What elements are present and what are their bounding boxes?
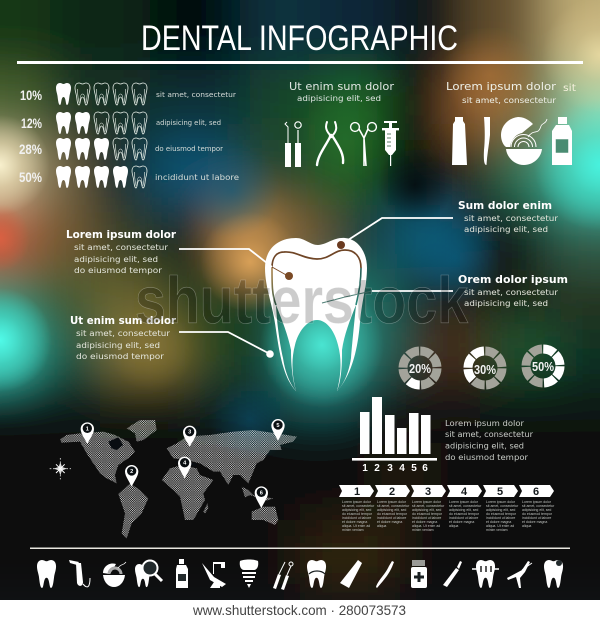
donut: 20%: 20% [409, 361, 431, 376]
icon: toothbrush [484, 117, 490, 165]
icon: crowned tooth [307, 560, 326, 588]
heading: care: sit [563, 83, 576, 94]
world map: 3 [188, 430, 191, 436]
step descriptions: do eiusmod tempor [377, 512, 408, 516]
icon: toothpaste [340, 560, 362, 588]
bar chart: 3 [387, 463, 393, 474]
heading: care: sit amet, consectetur [462, 95, 557, 105]
step descriptions: sit amet, consectetur [377, 504, 410, 508]
process arrows: 3 [425, 486, 431, 498]
step descriptions: Lorem ipsum dolor [449, 500, 479, 504]
process arrows: 4 [461, 486, 468, 498]
step descriptions: do eiusmod tempor [486, 512, 517, 516]
callout: upper left: do eiusmod tempor [74, 265, 163, 275]
step descriptions: minim veniam [342, 528, 364, 532]
step descriptions: do eiusmod tempor [412, 512, 443, 516]
icon: implant [240, 560, 258, 588]
row 28% [19, 138, 224, 160]
world map: 5 [276, 423, 280, 429]
donut: 20% [403, 351, 437, 385]
step descriptions: adipisicing elit, sed [522, 508, 551, 512]
step descriptions: aliqua [522, 524, 531, 528]
row 10% [20, 83, 237, 105]
row 12% [21, 112, 221, 134]
step descriptions: sit amet, consectetur [522, 504, 555, 508]
heading: tools: adipisicing elit, sed [297, 93, 381, 103]
panel: tooth percentage rows [19, 83, 239, 188]
world map [50, 419, 297, 538]
step descriptions: sit amet, consectetur [412, 504, 445, 508]
step descriptions: et dolore magna [522, 520, 547, 524]
icons: oral care [452, 117, 572, 165]
callout: upper right: adipisicing elit, sed [464, 224, 548, 234]
row 10%: 10% [20, 87, 42, 103]
world map: 2 [130, 469, 133, 475]
bar chart caption: adipisicing elit, sed [445, 442, 524, 450]
pins [81, 419, 285, 508]
donut: 30%: 30% [474, 362, 496, 377]
step descriptions: adipisicing elit, sed [377, 508, 406, 512]
tooth diagram [265, 238, 372, 391]
callout: upper left: Lorem ipsum dolor [66, 229, 177, 241]
icon: tooth with decay [544, 560, 563, 588]
callout: upper right: sit amet, consectetur [464, 213, 559, 223]
bar chart: 4 [399, 463, 405, 474]
callout: upper left: sit amet, consectetur [74, 242, 169, 252]
bar chart caption [445, 419, 534, 462]
icon: tooth under magnifier [135, 560, 162, 587]
donut: 30% [461, 344, 509, 392]
icon: electric toothbrush [443, 561, 462, 587]
title: DENTAL INFOGRAPHIC [141, 19, 458, 58]
row 50%: incididunt ut labore [155, 172, 239, 182]
callout: lower right: sit amet, consectetur [464, 287, 559, 297]
callout: lower right: Orem dolor ipsum [458, 274, 568, 286]
callout: lower left: adipisicing elit, sed [76, 340, 160, 350]
icon row [37, 559, 563, 590]
callout: upper right [337, 200, 559, 249]
icon: medicine bottle [411, 560, 427, 588]
icon: toothbrush [376, 561, 394, 588]
row 12%: 12% [21, 115, 42, 131]
step descriptions: minim veniam [486, 528, 508, 532]
icon: mouthwash [552, 117, 572, 165]
step descriptions: et dolore magna [449, 520, 474, 524]
step descriptions: incididunt ut labore [486, 516, 515, 520]
step descriptions: adipisicing elit, sed [412, 508, 441, 512]
callout: lower left: sit amet, consectetur [76, 328, 171, 338]
process arrows [339, 485, 554, 498]
icon: forceps [351, 123, 376, 166]
icon: tooth with braces [472, 560, 499, 588]
heading: care: Lorem ipsum dolor [446, 80, 557, 93]
callout: lower right: adipisicing elit, sed [464, 298, 548, 308]
step descriptions: Lorem ipsum dolor [412, 500, 442, 504]
step descriptions: do eiusmod tempor [522, 512, 553, 516]
step descriptions: adipisicing elit, sed [449, 508, 478, 512]
heading: care [446, 80, 576, 105]
step descriptions: sit amet, consectetur [342, 504, 375, 508]
step descriptions: incididunt ut labore [342, 516, 371, 520]
process arrows: 2 [389, 486, 395, 498]
row 28%: 28% [19, 141, 42, 157]
bar chart: 5 [411, 463, 417, 474]
world map: 4 [183, 461, 187, 467]
map gaps [108, 437, 197, 467]
row 50%: 50% [19, 169, 42, 185]
bar chart [352, 397, 437, 474]
donut: 50%: 50% [532, 359, 554, 374]
callout: upper right: Sum dolor enim [458, 200, 552, 212]
icon: syringe [382, 121, 399, 166]
step descriptions: aliqua. Ut enim ad [342, 524, 370, 528]
footer credit: www.shutterstock.com · 280073573 [192, 602, 406, 618]
icon: floss [103, 562, 126, 587]
icon: pliers [507, 561, 532, 588]
callout: upper left [66, 229, 293, 280]
process arrows: 1 [354, 486, 360, 498]
step descriptions: et dolore magna [486, 520, 511, 524]
process arrows: 6 [533, 486, 539, 498]
bar chart: 2 [374, 463, 380, 474]
watermark: shutterstock [135, 263, 468, 337]
step descriptions: Lorem ipsum dolor [522, 500, 552, 504]
icon: pliers [317, 122, 343, 165]
world map: 1 [86, 426, 89, 432]
step descriptions: incididunt ut labore [377, 516, 406, 520]
step descriptions: incididunt ut labore [522, 516, 551, 520]
step descriptions [342, 500, 555, 532]
world map: 6 [260, 490, 263, 496]
row 10%: sit amet, consectetur [156, 90, 237, 99]
donut: 50% [526, 349, 560, 383]
icon: dental chair [202, 562, 226, 588]
icons: dental tools [285, 121, 399, 167]
step descriptions: et dolore magna [412, 520, 437, 524]
icon: probes [285, 122, 301, 167]
step descriptions: adipisicing elit, sed [342, 508, 371, 512]
icon: probes [273, 562, 293, 590]
step descriptions: aliqua. Ut enim ad [486, 524, 514, 528]
step descriptions: aliqua [377, 524, 386, 528]
bar chart caption: sit amet, consectetur [445, 430, 534, 439]
row 28%: do eiusmod tempor [155, 144, 224, 153]
step descriptions: sit amet, consectetur [486, 504, 519, 508]
step descriptions: Lorem ipsum dolor [377, 500, 407, 504]
callout: upper left: adipisicing elit, sed [74, 254, 158, 264]
step descriptions: do eiusmod tempor [342, 512, 373, 516]
footer credit [0, 600, 600, 620]
bar chart caption: do eiusmod tempor [445, 453, 529, 462]
step descriptions: adipisicing elit, sed [486, 508, 515, 512]
process arrows: 5 [497, 486, 503, 498]
icon: mouthwash [176, 559, 188, 588]
icon: floss [501, 117, 547, 165]
step descriptions: sit amet, consectetur [449, 504, 482, 508]
step descriptions: aliqua [449, 524, 458, 528]
heading: tools [289, 80, 395, 103]
step descriptions: et dolore magna [377, 520, 402, 524]
step descriptions: minim veniam [412, 528, 434, 532]
bar chart caption: Lorem ipsum dolor [445, 419, 525, 428]
step descriptions: et dolore magna [342, 520, 367, 524]
step descriptions: Lorem ipsum dolor [486, 500, 516, 504]
bar chart: 1 [362, 463, 368, 474]
row 12%: adipisicing elit, sed [156, 118, 221, 127]
step descriptions: incididunt ut labore [449, 516, 478, 520]
heading: tools: Ut enim sum dolor [289, 80, 395, 93]
icon: compass [50, 458, 71, 479]
step descriptions: aliqua. Ut enim ad [412, 524, 440, 528]
callout: lower left: do eiusmod tempor [76, 351, 165, 361]
row 50% [19, 166, 239, 188]
icon: toothpaste [452, 117, 467, 165]
continents [60, 420, 297, 538]
icon: tooth [37, 560, 56, 588]
callout: lower left [70, 315, 274, 361]
callout: lower left: Ut enim sum dolor [70, 315, 177, 327]
bar chart: 6 [422, 463, 428, 474]
icon: handpiece [69, 560, 90, 587]
step descriptions: incididunt ut labore [412, 516, 441, 520]
step descriptions: Lorem ipsum dolor [342, 500, 372, 504]
callout: lower right [313, 274, 568, 308]
step descriptions: do eiusmod tempor [449, 512, 480, 516]
